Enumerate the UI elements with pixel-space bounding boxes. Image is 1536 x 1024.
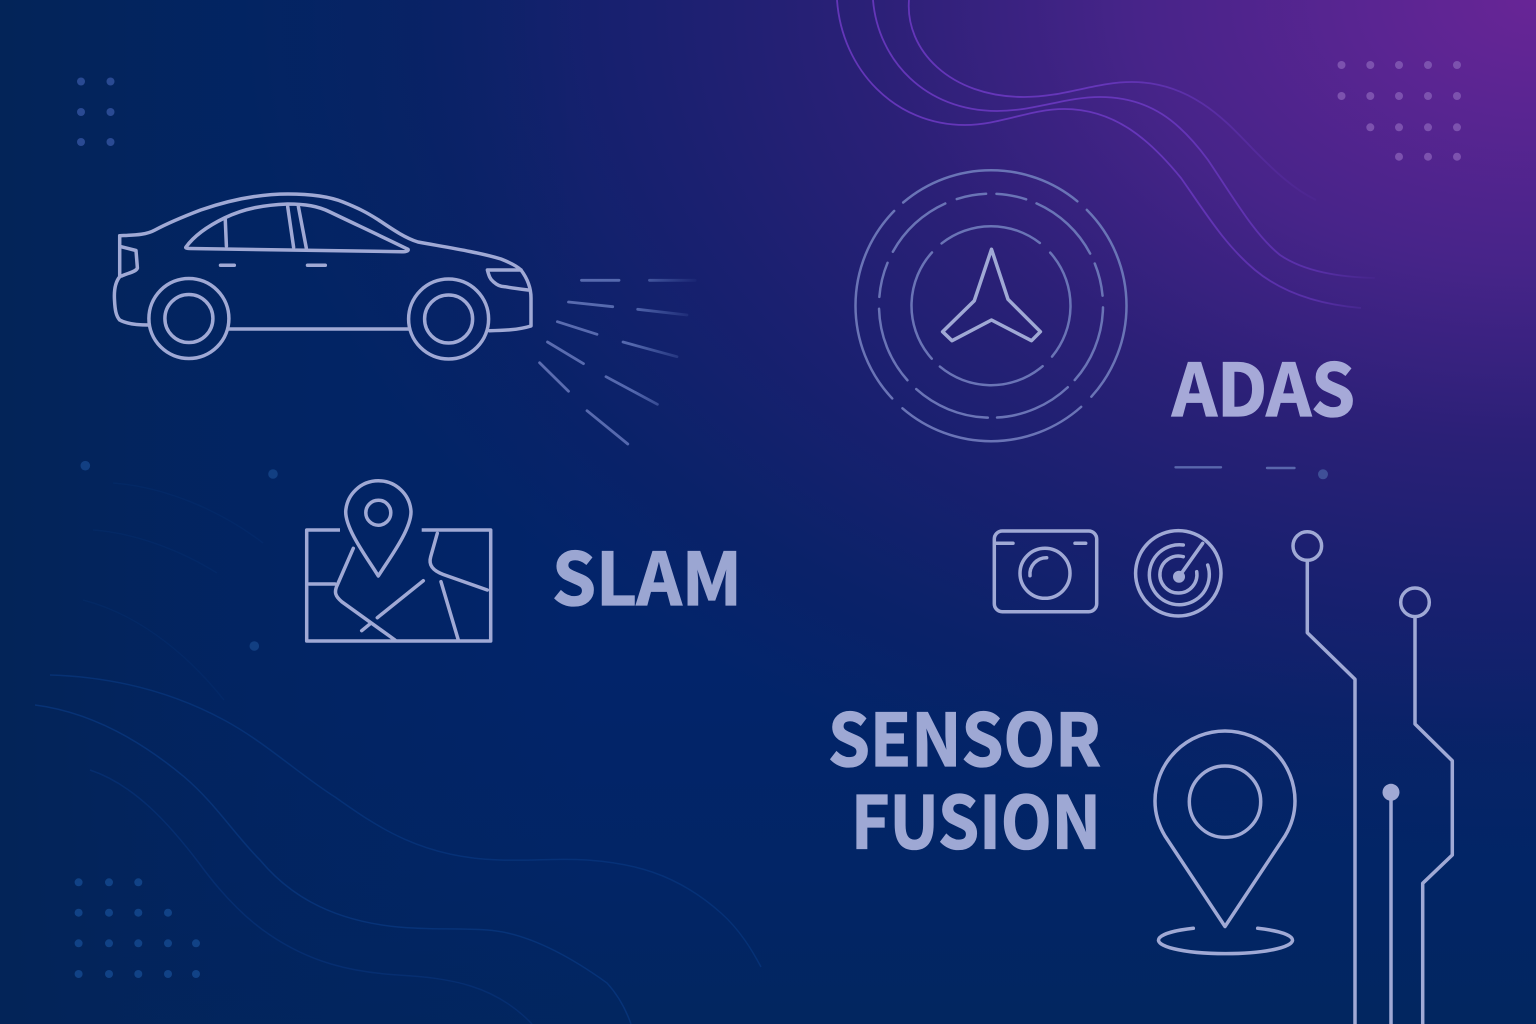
dot grid: top left — [77, 78, 114, 146]
label: SLAM: SLAM — [552, 521, 742, 626]
circuit traces — [1293, 532, 1452, 1024]
label: SENSOR FUSION: FUSION — [851, 764, 1101, 870]
icon: navigation arrow — [943, 249, 1040, 341]
label: ADAS: ADAS — [1171, 332, 1355, 437]
radar rings around navigation arrow — [856, 170, 1126, 441]
scattered dots: left — [80, 461, 278, 651]
headlight beams — [540, 280, 695, 444]
icon: radar — [1136, 531, 1221, 616]
background wave lines: top right — [837, 0, 1375, 308]
dot grid: bottom left — [75, 878, 200, 978]
background wave lines: bottom left — [35, 483, 761, 1024]
label: SENSOR FUSION: SENSOR — [828, 682, 1101, 787]
icon: large location pin — [1155, 731, 1295, 954]
icon: camera — [994, 531, 1097, 612]
dot grid: top right — [1338, 61, 1461, 161]
ADAS underline dashes and dot — [1176, 467, 1328, 479]
label: SENSOR FUSION — [828, 682, 1101, 870]
icon: map with location pin — [307, 481, 491, 641]
icon: car — [114, 194, 531, 359]
